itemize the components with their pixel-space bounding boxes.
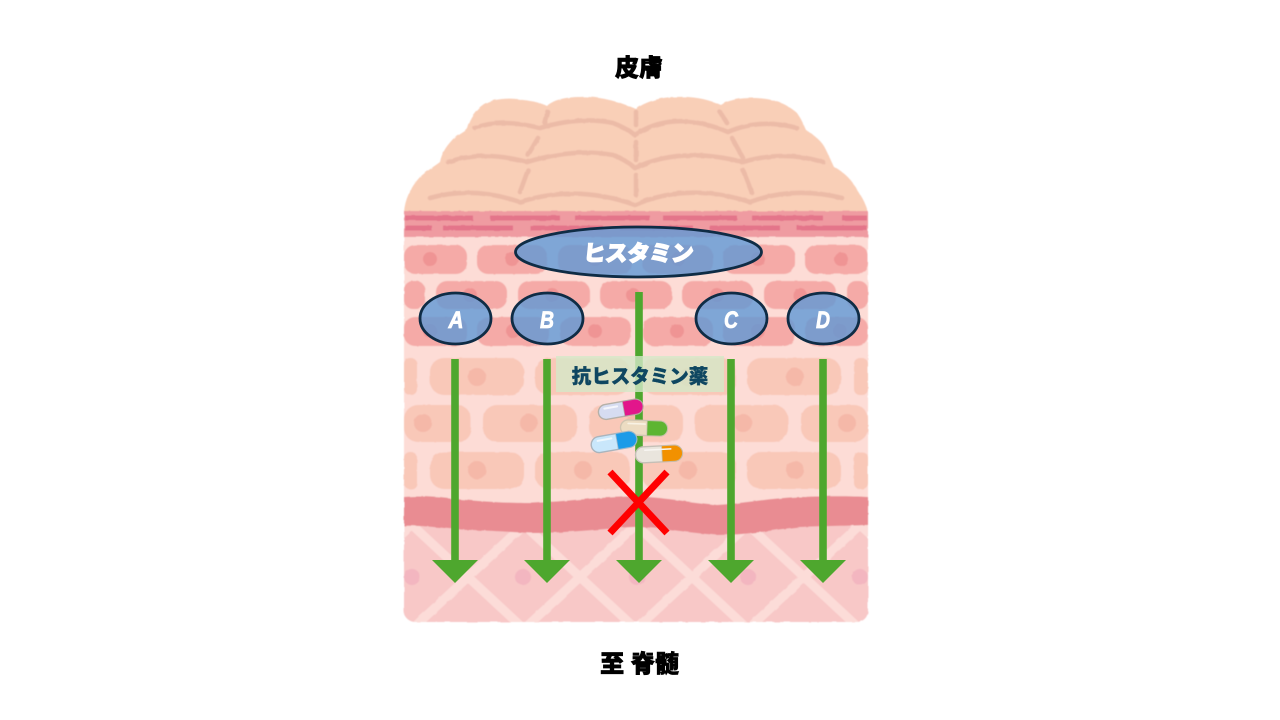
receptor B: B — [540, 307, 554, 334]
arrow: D — [800, 359, 846, 583]
receptor A: A — [448, 307, 464, 334]
arrow: B — [524, 359, 570, 583]
lower cell nuclei — [414, 368, 856, 479]
capsule: orange — [635, 445, 683, 463]
upper cell nuclei — [423, 252, 848, 338]
capsules — [590, 398, 683, 463]
capsule: blue — [590, 430, 638, 454]
receptor D: D — [816, 307, 830, 334]
arrow: C — [708, 359, 754, 583]
cell layer background — [404, 237, 868, 532]
capsule: magenta — [597, 398, 644, 421]
antihistamine label: 抗ヒスタミン薬 — [572, 366, 708, 388]
histamine oval: ヒスタミン — [582, 241, 695, 266]
skin cross-section illustration — [402, 96, 870, 623]
receptor D — [788, 293, 859, 344]
title: skin: 皮膚 — [615, 55, 663, 82]
dermis with lattice — [403, 525, 869, 623]
histamine oval — [516, 227, 762, 277]
receptor C: C — [724, 307, 739, 334]
receptor B — [512, 293, 583, 344]
dermis nuclei — [404, 569, 868, 585]
capsule: green — [620, 420, 668, 436]
receptor A — [420, 293, 491, 344]
arrow: center — [616, 292, 662, 583]
footer label: to spinal cord: 至 脊髄 — [600, 650, 679, 678]
lower cell rows — [404, 358, 868, 489]
red cross — [610, 472, 667, 533]
surface creases — [430, 112, 842, 205]
arrow: A — [432, 359, 478, 583]
upper red layer — [404, 211, 868, 238]
antihistamine label — [556, 356, 724, 392]
upper cell rows — [404, 245, 868, 346]
skin surface — [404, 97, 868, 212]
wavy band — [404, 496, 868, 535]
receptor C — [696, 293, 767, 344]
